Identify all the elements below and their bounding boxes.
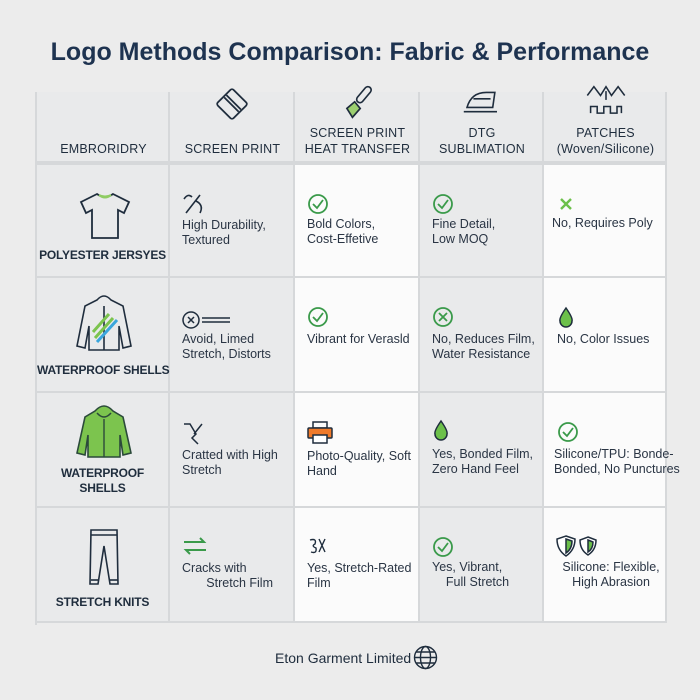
footer: company name with globe — [275, 646, 438, 670]
header: screen print with icon: SCREEN PRINT — [185, 142, 280, 156]
header: embroidery: EMBRORIDRY — [60, 142, 147, 156]
cell: bold colors: Cost-Effetive — [307, 232, 378, 246]
cell: fine detail — [432, 194, 495, 246]
icon: green hoodie — [76, 405, 132, 458]
cell: reduces film — [432, 307, 535, 361]
cell: cracks: Cracks with — [182, 561, 247, 575]
cell: bonded film: Zero Hand Feel — [432, 462, 519, 476]
cell: stretch-rated — [307, 538, 411, 590]
icon: t-shirt — [80, 193, 130, 239]
header: patches with icon: PATCHES — [576, 126, 635, 140]
cell: reduces film: No, Reduces Film, — [432, 332, 535, 346]
row 2: waterproof shells — [37, 278, 667, 393]
cell: photo quality — [307, 421, 411, 478]
header: heat transfer with brush icon — [305, 86, 410, 156]
cell: cratted: Stretch — [182, 463, 222, 477]
cell: vibrant full stretch — [432, 537, 509, 589]
header: heat transfer with brush icon: HEAT TRANSFER — [305, 142, 410, 156]
cell: fine detail: Fine Detail, — [432, 217, 495, 231]
cell: vibrant — [307, 307, 410, 346]
cell: bonded film: Yes, Bonded Film, — [432, 447, 533, 461]
cell: silicone flexible: Silicone: Flexible, — [562, 560, 660, 574]
cell: bold colors: Bold Colors, — [307, 217, 375, 231]
row 3: waterproof shells green — [37, 393, 680, 508]
icon: jacket outline — [76, 295, 132, 351]
cell: high durability: Textured — [182, 233, 230, 247]
title: Logo Methods Comparison: Fabric & Performance — [51, 38, 649, 66]
row 4: stretch knits — [37, 508, 667, 623]
cell: silicone tpu — [554, 422, 680, 476]
header: DTG with iron icon: SUBLIMATION — [439, 142, 525, 156]
table — [35, 92, 667, 625]
header: patches with icon — [557, 85, 654, 156]
cell: color issues — [557, 306, 649, 346]
row 1: polyester jerseys: POLYESTER JERSYES — [39, 248, 166, 262]
cell: cratted — [182, 423, 278, 477]
cell: silicone tpu: Silicone/TPU: Bonde- — [554, 447, 674, 461]
cell: stretch-rated: Film — [307, 576, 331, 590]
cell: high durability — [182, 194, 266, 247]
cell: reduces film: Water Resistance — [432, 347, 530, 361]
cell: silicone tpu: Bonded, No Punctures — [554, 462, 680, 476]
header: patches with icon: (Woven/Silicone) — [557, 142, 654, 156]
row 3: waterproof shells green: WATERPROOF — [61, 466, 144, 480]
row 4: stretch knits: STRETCH KNITS — [56, 595, 149, 609]
cell: avoid: Stretch, Distorts — [182, 347, 271, 361]
cell: requires poly: No, Requires Poly — [552, 216, 653, 230]
row 2: waterproof shells: WATERPROOF SHELLS — [37, 363, 169, 377]
header row — [37, 85, 667, 163]
header: screen print with icon — [185, 88, 280, 156]
cell: vibrant: Vibrant for Verasld — [307, 332, 410, 346]
cell: stretch-rated: Yes, Stretch-Rated — [307, 561, 411, 575]
cell: avoid — [182, 311, 271, 361]
cell: cracks: Stretch Film — [206, 576, 273, 590]
cell: high durability: High Durability, — [182, 218, 266, 232]
cell: requires poly — [552, 198, 653, 230]
cell: cratted: Cratted with High — [182, 448, 278, 462]
cell: cracks — [182, 537, 273, 590]
cell: avoid: Avoid, Limed — [182, 332, 254, 346]
cell: fine detail: Low MOQ — [432, 232, 488, 246]
cell: silicone flexible: High Abrasion — [572, 575, 650, 589]
header: DTG with iron icon: DTG — [468, 126, 496, 140]
cell: color issues: No, Color Issues — [557, 332, 649, 346]
cell: photo quality: Hand — [307, 464, 337, 478]
cell: bonded film — [432, 420, 533, 476]
cell: vibrant full stretch: Full Stretch — [446, 575, 509, 589]
cell: silicone flexible — [556, 535, 660, 589]
footer: company name with globe: Eton Garment Limited — [275, 650, 411, 666]
icon: pants — [89, 529, 119, 585]
row 3: waterproof shells green: SHELLS — [79, 481, 126, 495]
cell: photo quality: Photo-Quality, Soft — [307, 449, 411, 463]
row 1: polyester jerseys — [37, 163, 667, 278]
cell: bold colors — [307, 194, 378, 246]
header: DTG with iron icon — [439, 92, 525, 156]
header: heat transfer with brush icon: SCREEN PRINT — [310, 126, 405, 140]
cell: vibrant full stretch: Yes, Vibrant, — [432, 560, 502, 574]
